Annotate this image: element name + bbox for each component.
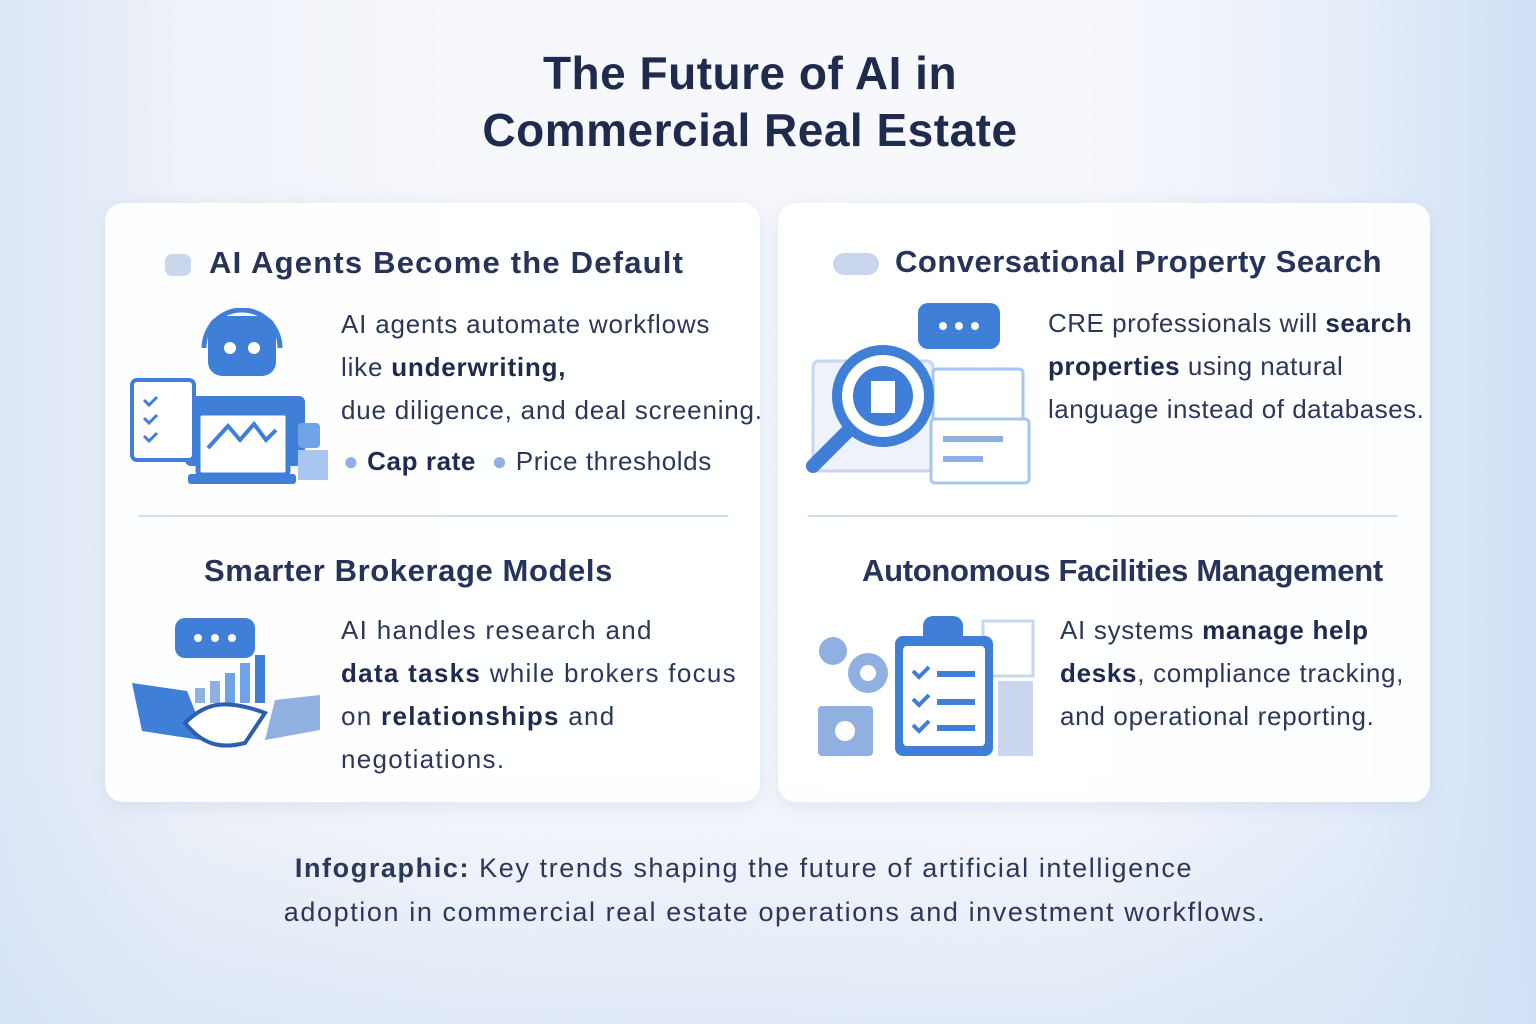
icon: magnifier search	[806, 303, 1030, 484]
caption	[284, 853, 1266, 927]
caption: Infographic: Key trends shaping the future of artificial intelligence	[295, 853, 1193, 883]
text: brokerage body: AI handles research and	[341, 615, 653, 645]
text: brokerage body: on relationships and	[341, 701, 616, 731]
title: Commercial Real Estate	[482, 104, 1018, 156]
heading: brokerage: Smarter Brokerage Models	[204, 553, 613, 588]
text: search body: CRE professionals will search	[1048, 308, 1412, 338]
heading: conversational search: Conversational Property Search	[895, 244, 1382, 279]
text: facilities body: desks, compliance tracking,	[1060, 658, 1404, 688]
bullets: ● Cap rate ● Price thresholds	[343, 446, 712, 476]
text: brokerage body	[341, 615, 737, 774]
caption: adoption in commercial real estate operations and investment workflows.	[284, 897, 1266, 927]
panel: left	[105, 203, 760, 802]
text: brokerage body: data tasks while brokers focus	[341, 658, 737, 688]
title	[482, 47, 1018, 156]
text: facilities body: AI systems manage help	[1060, 615, 1369, 645]
icon: robot agent	[130, 308, 328, 484]
text: brokerage body: negotiations.	[341, 744, 505, 774]
text: search body: properties using natural	[1048, 351, 1343, 381]
heading: AI agents: AI Agents Become the Default	[209, 245, 684, 280]
text: search body	[1048, 308, 1424, 424]
text: agents body: due diligence, and deal screening.	[341, 395, 763, 425]
text: facilities body: and operational reporting.	[1060, 701, 1375, 731]
text: search body: language instead of databases.	[1048, 394, 1424, 424]
panel: right	[778, 203, 1430, 802]
text: facilities body	[1060, 615, 1404, 731]
icon: handshake	[132, 618, 320, 748]
text: agents body	[341, 309, 763, 425]
text: agents body: AI agents automate workflows	[341, 309, 710, 339]
text: agents body: like underwriting,	[341, 352, 566, 382]
icon: clipboard gears	[818, 616, 1034, 756]
heading: facilities: Autonomous Facilities Management	[862, 553, 1383, 588]
title: The Future of AI in	[543, 47, 957, 99]
